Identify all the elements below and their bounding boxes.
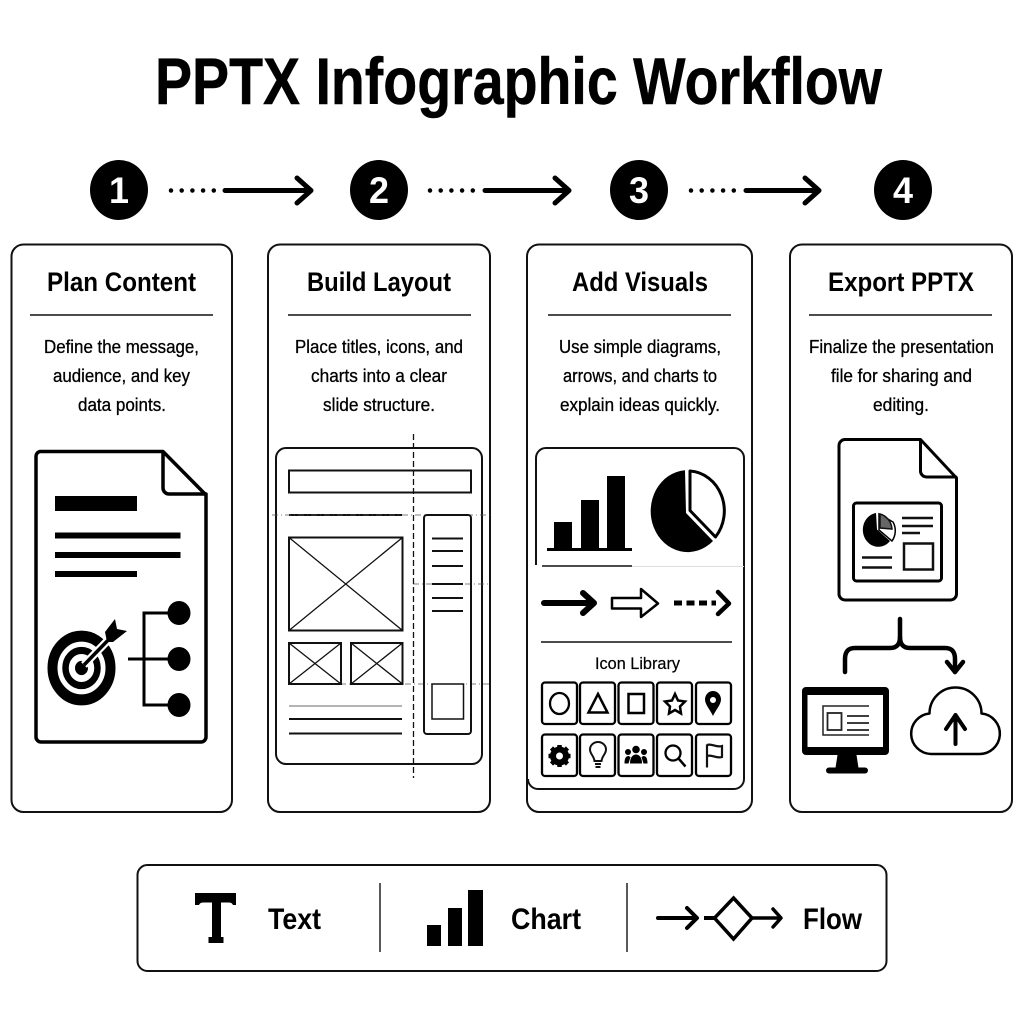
text block: add visuals description bbox=[559, 337, 721, 415]
step 4 badge: 4 bbox=[893, 170, 913, 211]
text block: plan content description: audience, and key bbox=[53, 366, 190, 386]
image placeholder: large bbox=[289, 538, 402, 630]
step 1 badge bbox=[90, 160, 148, 220]
icon: pptx document bbox=[839, 440, 956, 600]
icon: gear bbox=[548, 745, 570, 767]
icon: square bbox=[628, 694, 644, 713]
label: icon library: Icon Library bbox=[595, 654, 680, 673]
legend item: flow: Flow bbox=[803, 903, 863, 936]
panel: export pptx bbox=[790, 244, 1012, 812]
text block: build layout description: slide structure. bbox=[323, 395, 435, 415]
text block: plan content description: data points. bbox=[78, 395, 166, 415]
icon: target with dart bbox=[52, 619, 127, 700]
arrow: solid bbox=[544, 593, 594, 613]
visual library frame bbox=[528, 448, 744, 789]
step 3 badge bbox=[610, 160, 668, 220]
arrow: branching connector bbox=[845, 619, 963, 672]
icon: people bbox=[624, 746, 648, 764]
panel: build layout bbox=[268, 244, 490, 812]
text block: export pptx description: file for sharing and bbox=[831, 366, 972, 386]
text block: add visuals description: Use simple diagrams, bbox=[559, 337, 721, 357]
arrow: outline bbox=[612, 589, 658, 617]
arrow: step 2 to 3 bbox=[430, 178, 569, 203]
legend bbox=[138, 865, 886, 971]
text block: add visuals description: arrows, and charts to bbox=[563, 366, 717, 386]
step 2 badge: 2 bbox=[369, 170, 389, 211]
image placeholder: small left bbox=[289, 643, 341, 684]
arrow: dashed bbox=[674, 592, 729, 614]
legend item: text bbox=[195, 893, 321, 943]
text block: plan content description bbox=[44, 337, 199, 415]
icon: bars bbox=[427, 890, 483, 946]
heading: add visuals: Add Visuals bbox=[572, 267, 708, 297]
text block: export pptx description: editing. bbox=[873, 395, 929, 415]
icon: flag bbox=[707, 744, 722, 768]
legend item: text: Text bbox=[268, 903, 321, 936]
text block: export pptx description: Finalize the presentation bbox=[809, 337, 994, 357]
icon: triangle bbox=[588, 694, 608, 712]
icon: light bulb bbox=[590, 742, 606, 767]
icon: document with target and tree bbox=[36, 452, 206, 742]
arrow: step 3 to 4 bbox=[691, 178, 819, 203]
icon: arrow diamond arrow bbox=[658, 898, 781, 939]
legend item: flow bbox=[658, 898, 863, 939]
pie chart bbox=[651, 470, 724, 552]
sidebar bbox=[424, 515, 471, 734]
panel: add visuals bbox=[527, 244, 752, 812]
step indicators row bbox=[90, 160, 932, 220]
wireframe slide layout bbox=[272, 434, 490, 778]
legend item: chart bbox=[427, 890, 581, 946]
slide thumbnail bbox=[854, 503, 942, 581]
icon: star bbox=[665, 694, 685, 714]
icon: cloud upload bbox=[911, 688, 1000, 754]
icon: monitor bbox=[802, 687, 889, 773]
text block: build layout description bbox=[295, 337, 463, 415]
icon: branching tree bbox=[128, 601, 190, 717]
step 2 badge bbox=[350, 160, 408, 220]
icon grid bbox=[542, 682, 731, 776]
text block: add visuals description: explain ideas quickly. bbox=[560, 395, 720, 415]
text block: plan content description: Define the message, bbox=[44, 337, 199, 357]
step 3 badge: 3 bbox=[629, 170, 649, 211]
icon: circle bbox=[550, 693, 569, 714]
step 1 badge: 1 bbox=[109, 170, 129, 211]
text block: export pptx description bbox=[809, 337, 994, 415]
image placeholder: small right bbox=[351, 643, 402, 684]
arrow: step 1 to 2 bbox=[171, 178, 311, 203]
heading: export pptx: Export PPTX bbox=[828, 267, 974, 297]
title: PPTX Infographic Workflow bbox=[155, 44, 883, 118]
legend item: chart: Chart bbox=[511, 903, 581, 936]
bar chart bbox=[547, 476, 632, 551]
icon: magnifier bbox=[666, 746, 686, 766]
icon: letter T bbox=[195, 893, 236, 943]
text block: build layout description: charts into a clear bbox=[311, 366, 447, 386]
step 4 badge bbox=[874, 160, 932, 220]
icon: map pin bbox=[705, 691, 721, 716]
text block: build layout description: Place titles, icons, and bbox=[295, 337, 463, 357]
heading: build layout: Build Layout bbox=[307, 267, 451, 297]
panel: plan content bbox=[12, 244, 232, 812]
heading: plan content: Plan Content bbox=[47, 267, 196, 297]
